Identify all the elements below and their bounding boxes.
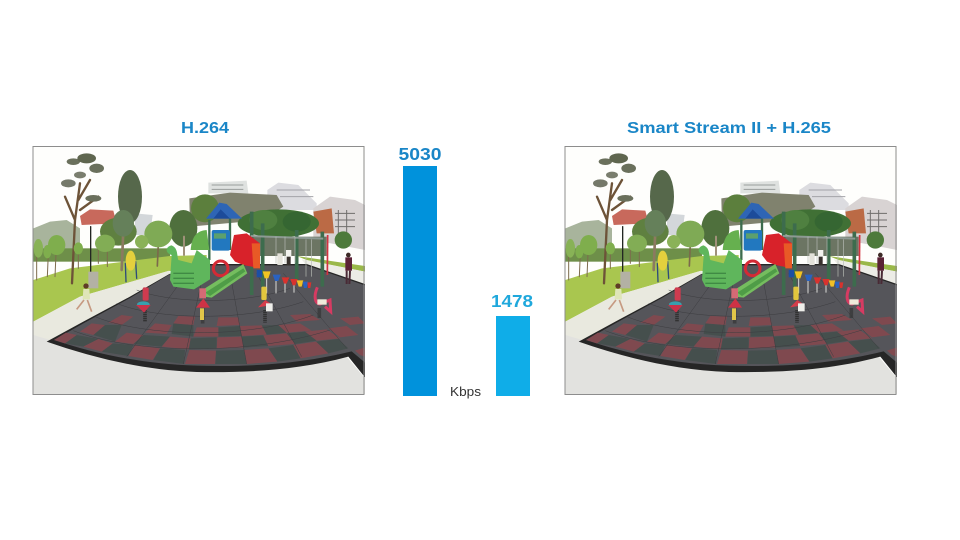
- heading: H.264: H.264: [181, 120, 229, 137]
- value: 5030: 5030: [398, 144, 442, 164]
- unit label: Kbps: Kbps: [450, 385, 481, 399]
- heading: Smart Stream II + H.265: Smart Stream II + H.265: [627, 120, 831, 137]
- value: 1478: 1478: [491, 291, 533, 311]
- photo panel: H.264 playground: [30, 140, 370, 400]
- infographic canvas: [32, 122, 897, 398]
- bar: H.264 bitrate: [403, 166, 437, 396]
- bar: Smart Stream II + H.265 bitrate: [496, 316, 530, 396]
- photo panel: Smart Stream II + H.265 playground: [562, 140, 902, 400]
- bar chart: bitrate comparison: [398, 144, 533, 399]
